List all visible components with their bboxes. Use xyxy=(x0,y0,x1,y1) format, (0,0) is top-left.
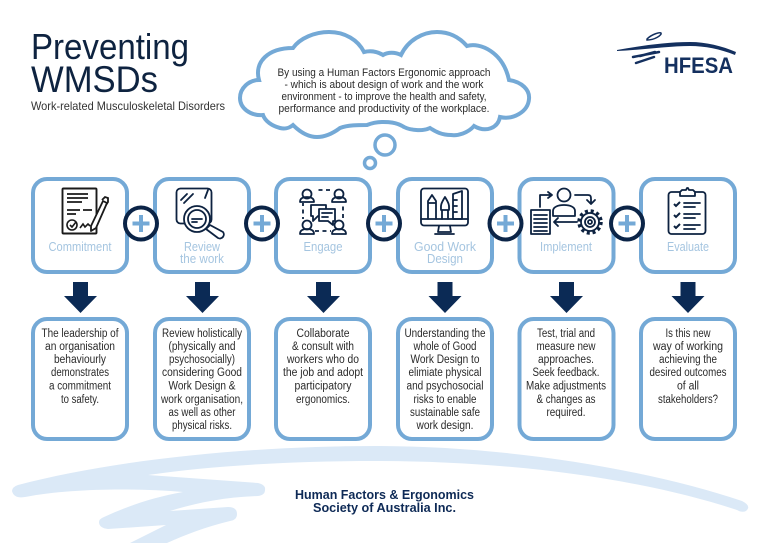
step label: Engage xyxy=(304,240,343,254)
description card: Review the work: considering Good xyxy=(162,367,242,379)
description card: Good Work Design: whole of Good xyxy=(413,341,476,353)
step label: Good Work xyxy=(414,240,477,254)
description card: Good Work Design: sustainable safe xyxy=(410,407,480,419)
description card: Commitment: behaviourly xyxy=(54,354,106,366)
description card: Review the work: work organisation, xyxy=(160,394,243,406)
description card: Commitment: a commitment xyxy=(49,380,112,392)
step card: Good Work Design xyxy=(398,179,492,272)
description card: Commitment: to safety. xyxy=(61,394,99,406)
step label xyxy=(414,240,477,266)
description card: Engage xyxy=(276,319,370,439)
footer organisation name: Society of Australia Inc. xyxy=(313,500,456,515)
thought cloud callout xyxy=(240,32,529,137)
step label xyxy=(180,240,225,266)
description card: Evaluate: way of working xyxy=(652,341,723,353)
description card: Implement: & changes as xyxy=(536,394,596,406)
icon: clipboard checklist xyxy=(668,188,706,234)
arrow 1 xyxy=(64,282,97,313)
description card: Engage: & consult with xyxy=(292,341,354,353)
description card: Engage: Collaborate xyxy=(296,328,350,340)
description card: Evaluate: of all xyxy=(677,380,699,392)
description card: Implement: approaches. xyxy=(538,354,594,366)
arrow 6 xyxy=(672,282,704,313)
subtitle: Work-related Musculoskeletal Disorders xyxy=(31,99,225,113)
HFESA logo: HFESA xyxy=(664,53,733,78)
description card: Implement: Seek feedback. xyxy=(532,367,600,379)
cloud text: - which is about design of work and the work xyxy=(284,79,484,91)
description card: Commitment xyxy=(33,319,127,439)
step card: Commitment xyxy=(33,179,127,272)
step card: Review the work xyxy=(155,179,249,272)
description card: Review the work: (physically and xyxy=(168,341,236,353)
cloud text: performance and productivity of the workplace. xyxy=(278,103,490,115)
description card: Implement: Make adjustments xyxy=(526,380,606,392)
description card: Commitment: The leadership of xyxy=(42,328,119,340)
cloud text xyxy=(278,67,490,115)
step card: Engage xyxy=(276,179,370,272)
description card: Implement xyxy=(520,319,614,439)
description card: Evaluate: stakeholders? xyxy=(658,394,718,406)
description card: Commitment: an organisation xyxy=(45,341,115,353)
description card: Good Work Design: risks to enable xyxy=(414,394,476,406)
plus connector 3 xyxy=(368,208,400,240)
description card: Review the work: as well as other xyxy=(168,407,236,419)
HFESA logo xyxy=(617,33,736,78)
plus connector 2 xyxy=(246,208,278,240)
description card: Good Work Design: Understanding the xyxy=(404,328,486,340)
background brush swoosh xyxy=(12,446,748,543)
description card: Evaluate: Is this new xyxy=(666,328,711,340)
title xyxy=(31,26,189,100)
icon: people in discussion xyxy=(299,187,347,235)
description card: Good Work Design xyxy=(398,319,492,439)
cloud text: environment - to improve the health and safety, xyxy=(282,91,486,103)
step label: Review xyxy=(184,240,221,254)
step label: the work xyxy=(180,252,225,266)
description card: Evaluate: desired outcomes xyxy=(650,367,727,379)
description card: Review the work: Review holistically xyxy=(162,328,242,340)
footer organisation name: Human Factors & Ergonomics xyxy=(295,487,474,502)
description card: Review the work: physical risks. xyxy=(172,420,232,432)
description card: Review the work: psychosocially) xyxy=(169,354,235,366)
icon: signed document xyxy=(62,188,108,234)
description card: Commitment: demonstrates xyxy=(51,367,109,379)
step label: Evaluate xyxy=(667,240,709,254)
icon: magnifier over square xyxy=(176,188,224,238)
footer organisation name xyxy=(295,487,474,515)
description card: Good Work Design: and psychosocial xyxy=(406,380,484,392)
description card: Engage: ergonomics. xyxy=(296,394,350,406)
arrow 4 xyxy=(428,282,462,313)
plus connector 5 xyxy=(611,208,643,240)
step card: Implement xyxy=(520,179,614,272)
description card: Engage: workers who do xyxy=(286,354,359,366)
plus connector 4 xyxy=(490,208,522,240)
description card: Implement: Test, trial and xyxy=(537,328,595,340)
thought bubble large xyxy=(375,135,395,155)
step label: Implement xyxy=(540,240,592,254)
description card: Good Work Design: Work Design to xyxy=(410,354,480,366)
description card: Implement: required. xyxy=(546,407,586,419)
arrow 3 xyxy=(307,282,340,313)
description card: Evaluate: achieving the xyxy=(659,354,717,366)
cloud text: By using a Human Factors Ergonomic approach xyxy=(278,67,490,79)
arrow 2 xyxy=(186,282,219,313)
step card: Evaluate xyxy=(641,179,735,272)
description card: Implement: measure new xyxy=(536,341,596,353)
description card: Evaluate xyxy=(641,319,735,439)
description card: Review the work xyxy=(155,319,249,439)
arrow 5 xyxy=(550,282,583,313)
description card: Review the work: Work Design & xyxy=(168,380,236,392)
icon: monitor with design tools xyxy=(421,188,468,234)
step label: Commitment xyxy=(48,240,112,254)
step label: Design xyxy=(427,252,463,266)
description card: Good Work Design: work design. xyxy=(416,420,474,432)
title: WMSDs xyxy=(31,59,158,100)
description card: Engage: the job and adopt xyxy=(283,367,364,379)
title: Preventing xyxy=(31,26,189,67)
description card: Engage: participatory xyxy=(294,380,352,392)
icon: worker, document and gear cycle xyxy=(531,188,601,234)
thought bubble small xyxy=(364,158,376,168)
plus connector 1 xyxy=(125,208,157,240)
description card: Good Work Design: elimiate physical xyxy=(408,367,482,379)
